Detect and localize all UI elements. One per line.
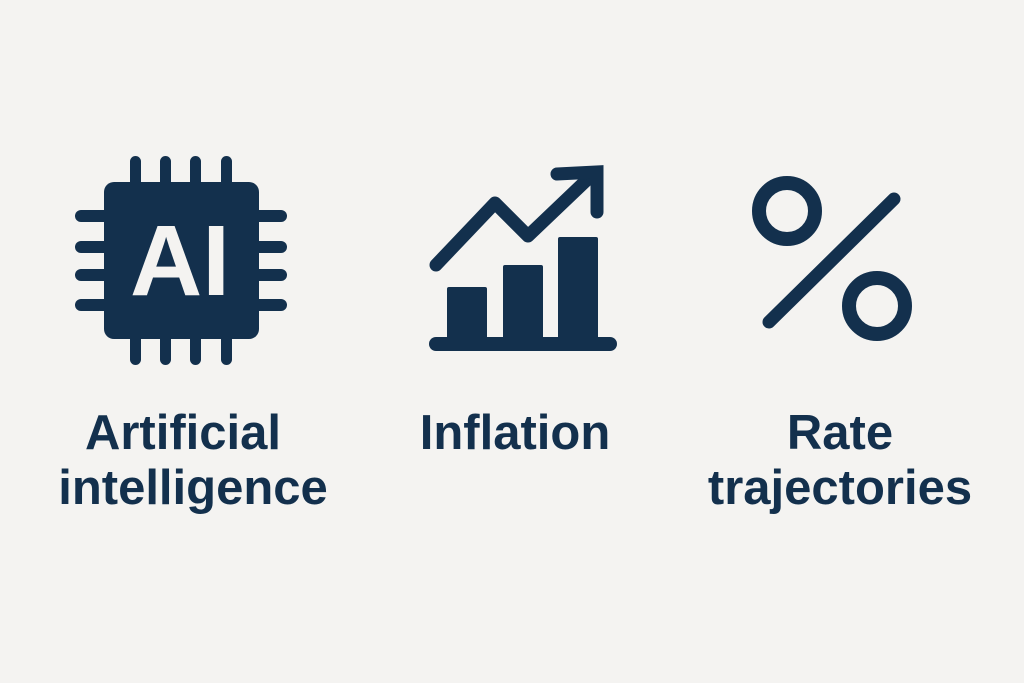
label: Artificial intelligence [58,406,328,515]
icon: AI chip [75,156,287,365]
label: Artificial intelligence: Artificial [85,406,281,460]
label: Inflation: Inflation [420,406,610,460]
label: Artificial intelligence: intelligence [58,461,328,515]
icon: AI chip: AI [130,205,230,317]
icon: inflation chart [436,172,610,344]
label: Rate trajectories [708,406,972,515]
label: Rate trajectories: Rate [787,406,893,460]
icon: percent [759,183,905,334]
label: Rate trajectories: trajectories [708,461,972,515]
